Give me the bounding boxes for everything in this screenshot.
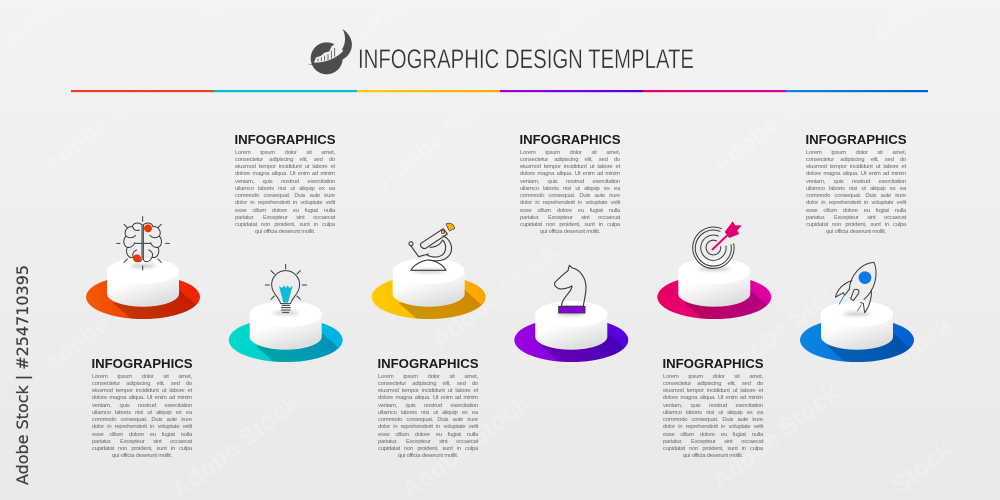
text block: step 2: dolor in reprehenderit in voluptate velit — [235, 200, 335, 206]
text block: step 2: ullamco laboris nisi ut aliquip ex ea — [235, 186, 335, 192]
step 1 pedestal: red — [86, 258, 200, 319]
text block: step 4: consectetur adipiscing elit, sed do — [520, 157, 620, 163]
text block: step 6: cupidatat non proident, sunt in culpa — [806, 222, 906, 228]
text block: step 5: veniam, quis nostrud exercitation — [663, 403, 763, 409]
text block: step 5 — [662, 356, 764, 459]
icon: microscope — [409, 223, 455, 270]
text block: step 6: dolore magna aliqua. Ut enim ad minim — [806, 171, 906, 177]
text block: step 2: dolore magna aliqua. Ut enim ad minim — [235, 171, 335, 177]
text block: step 6: ullamco laboris nisi ut aliquip ex ea — [806, 186, 906, 192]
text block: step 1: ullamco laboris nisi ut aliquip ex ea — [92, 410, 192, 416]
step 2 pedestal: cyan — [228, 301, 343, 362]
text block: step 3: Lorem ipsum dolor sit amet, — [378, 374, 478, 380]
watermark pattern: Adobe Stock — [706, 64, 844, 180]
step 3 pedestal: yellow — [372, 258, 486, 319]
text block: step 4: dolore magna aliqua. Ut enim ad minim — [520, 171, 620, 177]
text block: step 6: eiusmod tempor incididunt ut labore et — [806, 164, 906, 170]
text block: step 6: dolor in reprehenderit in voluptate velit — [806, 200, 906, 206]
text block: step 4: esse cillum dolore eu fugiat nulla — [520, 208, 620, 214]
text block: step 1: pariatur. Excepteur sint occaecat — [92, 439, 192, 445]
text block: step 3: cupidatat non proident, sunt in culpa — [378, 446, 478, 452]
logo icon — [307, 29, 352, 74]
text block: step 4: pariatur. Excepteur sint occaecat — [520, 215, 620, 221]
icon: chess knight — [555, 265, 586, 313]
text block: step 6: consectetur adipiscing elit, sed do — [806, 157, 906, 163]
text block: step 6 — [805, 132, 907, 235]
text block: step 4: cupidatat non proident, sunt in culpa — [520, 222, 620, 228]
text block: step 3: veniam, quis nostrud exercitation — [378, 403, 478, 409]
text block: step 4: INFOGRAPHICS — [519, 132, 621, 147]
text block: step 5: esse cillum dolore eu fugiat nulla — [663, 432, 763, 438]
stock id label: Adobe Stock | #254710395 — [13, 265, 32, 485]
text block: step 1: dolor in reprehenderit in voluptate velit — [92, 424, 192, 430]
title: INFOGRAPHIC DESIGN TEMPLATE — [358, 44, 694, 74]
text block: step 1: consectetur adipiscing elit, sed do — [92, 381, 192, 387]
text block: step 2: esse cillum dolore eu fugiat nulla — [235, 208, 335, 214]
text block: step 3: esse cillum dolore eu fugiat nulla — [378, 432, 478, 438]
text block: step 4: qui officia deserunt mollit. — [540, 229, 600, 235]
text block: step 5: ullamco laboris nisi ut aliquip ex ea — [663, 410, 763, 416]
watermark pattern: Adobe Stock — [716, 269, 854, 385]
text block: step 3: INFOGRAPHICS — [377, 356, 479, 371]
icon: light bulb — [265, 264, 307, 312]
text block: step 4: veniam, quis nostrud exercitation — [520, 179, 620, 185]
text block: step 2: commodo consequat. Duis aute irure — [235, 193, 335, 199]
watermark pattern: Stock — [886, 436, 957, 500]
text block: step 6: qui officia deserunt mollit. — [826, 229, 886, 235]
text block: step 2: Lorem ipsum dolor sit amet, — [235, 150, 335, 156]
text block: step 5: commodo consequat. Duis aute irure — [663, 417, 763, 423]
text block: step 6: commodo consequat. Duis aute irure — [806, 193, 906, 199]
text block: step 2: consectetur adipiscing elit, sed do — [235, 157, 335, 163]
text block: step 6: INFOGRAPHICS — [805, 132, 907, 147]
step 6 pedestal: blue — [800, 301, 914, 362]
text block: step 2: cupidatat non proident, sunt in culpa — [235, 222, 335, 228]
text block: step 6: Lorem ipsum dolor sit amet, — [806, 150, 906, 156]
watermark pattern: Stock — [886, 311, 957, 375]
text block: step 3 — [377, 356, 479, 459]
text block: step 5: INFOGRAPHICS — [662, 356, 764, 371]
step 4 pedestal: purple — [514, 301, 628, 362]
text block: step 1: Lorem ipsum dolor sit amet, — [92, 374, 192, 380]
text block: step 2: qui officia deserunt mollit. — [255, 229, 315, 235]
watermark pattern: Adobe Stock — [36, 264, 174, 380]
text block: step 3: dolor in reprehenderit in voluptate velit — [378, 424, 478, 430]
text block: step 5: eiusmod tempor incididunt ut labore et — [663, 388, 763, 394]
text block: step 4: dolor in reprehenderit in voluptate velit — [520, 200, 620, 206]
text block: step 1: eiusmod tempor incididunt ut labore et — [92, 388, 192, 394]
text block: step 6: veniam, quis nostrud exercitation — [806, 179, 906, 185]
text block: step 2 — [234, 132, 336, 235]
text block: step 4: commodo consequat. Duis aute irure — [520, 193, 620, 199]
text block: step 4: Lorem ipsum dolor sit amet, — [520, 150, 620, 156]
text block: step 1: esse cillum dolore eu fugiat nulla — [92, 432, 192, 438]
text block: step 5: Lorem ipsum dolor sit amet, — [663, 374, 763, 380]
icon: brain — [117, 217, 169, 270]
text block: step 6: esse cillum dolore eu fugiat nulla — [806, 208, 906, 214]
text block: step 3: consectetur adipiscing elit, sed do — [378, 381, 478, 387]
watermark pattern: Adobe Stock — [36, 64, 174, 180]
text block: step 5: dolor in reprehenderit in voluptate velit — [663, 424, 763, 430]
text block: step 2: eiusmod tempor incididunt ut labore et — [235, 164, 335, 170]
text block: step 3: eiusmod tempor incididunt ut labore et — [378, 388, 478, 394]
text block: step 1: veniam, quis nostrud exercitation — [92, 403, 192, 409]
text block: step 5: consectetur adipiscing elit, sed do — [663, 381, 763, 387]
text block: step 5: pariatur. Excepteur sint occaecat — [663, 439, 763, 445]
text block: step 3: qui officia deserunt mollit. — [398, 453, 458, 459]
watermark pattern: Adobe Stock — [426, 239, 564, 355]
text block: step 3: ullamco laboris nisi ut aliquip ex ea — [378, 410, 478, 416]
text block: step 1: INFOGRAPHICS — [91, 356, 193, 371]
text block: step 1: dolore magna aliqua. Ut enim ad minim — [92, 395, 192, 401]
text block: step 3: commodo consequat. Duis aute irure — [378, 417, 478, 423]
text block: step 5: cupidatat non proident, sunt in culpa — [663, 446, 763, 452]
text block: step 2: veniam, quis nostrud exercitation — [235, 179, 335, 185]
text block: step 1: cupidatat non proident, sunt in culpa — [92, 446, 192, 452]
text block: step 5: qui officia deserunt mollit. — [683, 453, 743, 459]
step 5 pedestal: magenta — [657, 258, 772, 319]
text block: step 4: ullamco laboris nisi ut aliquip ex ea — [520, 186, 620, 192]
text block: step 3: pariatur. Excepteur sint occaecat — [378, 439, 478, 445]
watermark pattern: Adobe Stock — [371, 79, 509, 195]
text block: step 5: dolore magna aliqua. Ut enim ad minim — [663, 395, 763, 401]
watermark pattern: Adobe Stock — [706, 379, 844, 495]
icon: rocket — [835, 262, 876, 313]
icon: target with arrow — [693, 221, 742, 268]
text block: step 2: pariatur. Excepteur sint occaecat — [235, 215, 335, 221]
text block: step 3: dolore magna aliqua. Ut enim ad minim — [378, 395, 478, 401]
text block: step 1 — [91, 356, 193, 459]
text block: step 4: eiusmod tempor incididunt ut labore et — [520, 164, 620, 170]
text block: step 6: pariatur. Excepteur sint occaecat — [806, 215, 906, 221]
text block: step 1: qui officia deserunt mollit. — [112, 453, 172, 459]
text block: step 1: commodo consequat. Duis aute irure — [92, 417, 192, 423]
text block: step 2: INFOGRAPHICS — [234, 132, 336, 147]
colored timeline rule — [71, 90, 928, 92]
text block: step 4 — [519, 132, 621, 235]
